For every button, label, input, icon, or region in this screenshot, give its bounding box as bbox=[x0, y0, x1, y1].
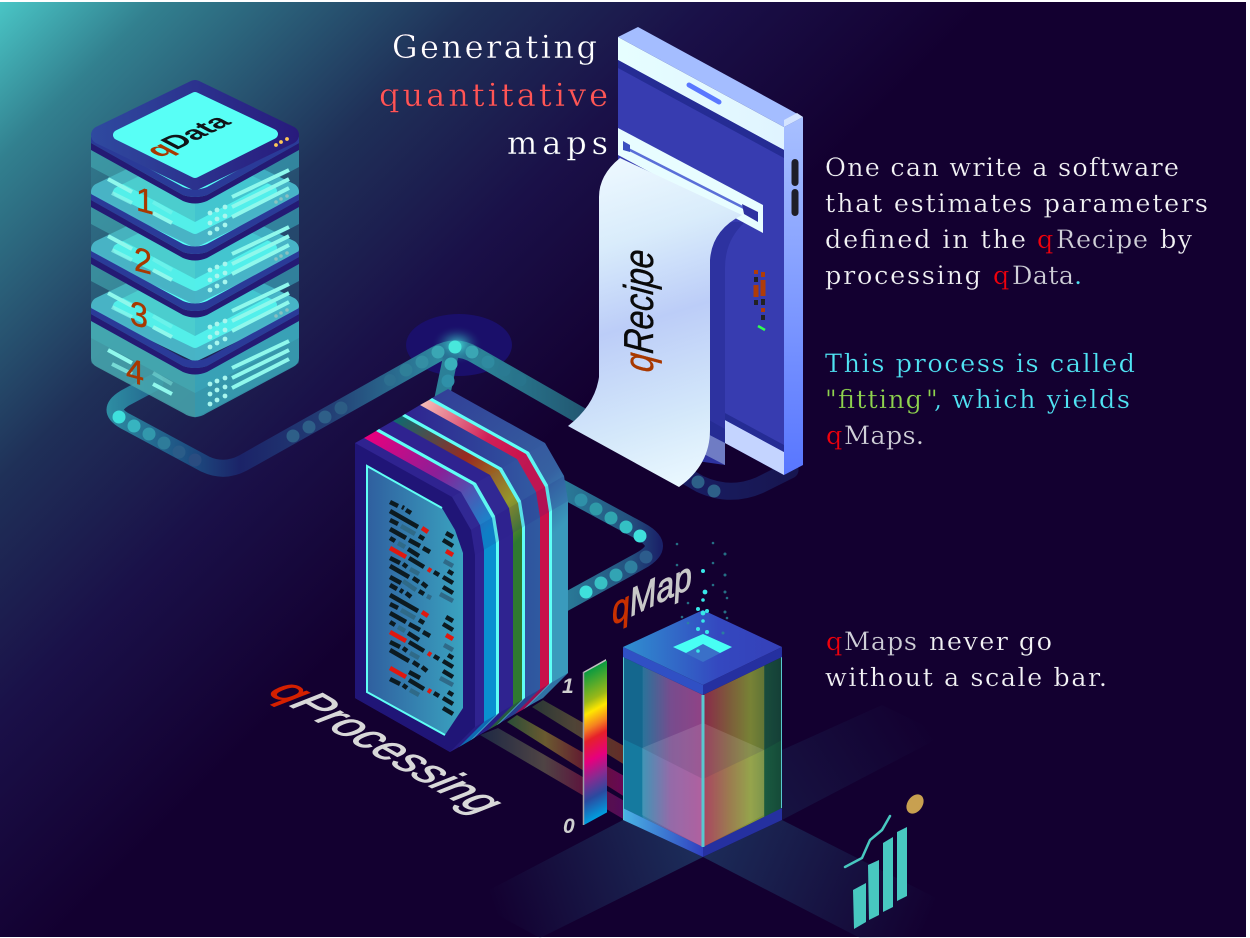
front face bbox=[355, 443, 475, 752]
rays from qProcessing to scale bar and cube bbox=[480, 700, 640, 820]
text: fitting explanation, part 1: q bbox=[1037, 225, 1053, 255]
text: scale bar note: never go bbox=[929, 627, 1052, 657]
magenta blue band bbox=[376, 429, 499, 740]
rear slab bbox=[432, 389, 568, 707]
label: 1: 1 bbox=[136, 180, 154, 223]
chamfer shading bbox=[452, 443, 564, 530]
text: fitting explanation, part 2: , bbox=[934, 385, 942, 415]
text: fitting explanation, part 2: which yields bbox=[952, 385, 1130, 415]
unit 2 walls bbox=[91, 199, 299, 304]
text: fitting explanation, part 1: q bbox=[993, 261, 1009, 291]
scale bar bbox=[562, 659, 607, 838]
text: fitting explanation, part 1: Data bbox=[1012, 261, 1074, 291]
text: scale bar note: without a scale bar. bbox=[825, 663, 1107, 693]
unit 4 lines bbox=[91, 313, 299, 418]
halo under pipe junction bbox=[406, 314, 512, 376]
paper strip: qRecipe bbox=[568, 158, 742, 487]
text: fitting explanation, part 2: q bbox=[826, 421, 842, 451]
pipe dots bbox=[112, 340, 720, 498]
label: 3: 3 bbox=[130, 294, 148, 337]
unit 3 walls bbox=[91, 256, 299, 361]
label: qMap: qMap bbox=[610, 553, 694, 633]
label: 4: 4 bbox=[126, 351, 144, 394]
scale label 1: 1 bbox=[562, 675, 574, 698]
phone side bbox=[784, 117, 803, 475]
icon: rising bar chart with coin bbox=[845, 791, 927, 929]
side buttons bbox=[792, 159, 798, 186]
floor glow cross bbox=[470, 705, 950, 938]
data screen bbox=[367, 466, 463, 735]
red band bbox=[429, 398, 552, 709]
base slab bbox=[623, 770, 782, 847]
text: fitting explanation, part 1: defined in the bbox=[825, 225, 1026, 255]
paper shadow bbox=[690, 222, 745, 465]
second slab bbox=[379, 421, 513, 738]
plate 1 bbox=[91, 146, 299, 260]
text: scale bar note: q bbox=[826, 627, 842, 657]
icon: pipe junction glow bbox=[431, 325, 483, 365]
label: qData: qData bbox=[138, 111, 240, 161]
text: scale bar note bbox=[825, 627, 1107, 693]
label: qProcessing: qProcessing bbox=[258, 672, 516, 821]
speaker bbox=[689, 85, 719, 102]
text: fitting explanation, part 1: by bbox=[1160, 225, 1193, 255]
translucent inner plane bbox=[642, 723, 764, 847]
text: scale bar note: Maps bbox=[844, 627, 917, 657]
olive green band bbox=[402, 414, 525, 725]
top slab bbox=[623, 647, 703, 695]
glass left bbox=[623, 657, 703, 847]
third slab bbox=[405, 405, 540, 723]
title: Generating bbox=[392, 28, 597, 66]
unit 1 walls bbox=[91, 142, 299, 247]
particles bbox=[676, 542, 728, 653]
text: fitting explanation, part 1: that estimates parameters bbox=[825, 189, 1208, 219]
unit 4 base bbox=[91, 313, 299, 417]
upper glass darkening bbox=[623, 657, 782, 779]
phone top face bbox=[618, 27, 803, 127]
text: fitting explanation, part 1: . bbox=[1074, 261, 1082, 291]
text: fitting explanation, part 2: fitting bbox=[838, 385, 922, 415]
label: qRecipe: qRecipe bbox=[617, 247, 663, 374]
printer slot bbox=[618, 128, 763, 233]
text: fitting explanation, part 1: One can write a software bbox=[825, 153, 1179, 183]
scale label 0: 0 bbox=[563, 815, 575, 838]
connection pipe from qData to qRecipe bbox=[115, 349, 790, 491]
text: fitting explanation, part 2: " bbox=[825, 385, 837, 415]
front slab bbox=[355, 438, 484, 752]
phone front bbox=[618, 37, 784, 475]
title: quantitative bbox=[379, 76, 608, 114]
title bbox=[379, 28, 608, 162]
text: fitting explanation, part 1 bbox=[825, 153, 1208, 291]
text: fitting explanation, part 2: " bbox=[926, 385, 938, 415]
code rows bbox=[390, 502, 453, 714]
label: 2: 2 bbox=[134, 240, 152, 283]
glass right bbox=[703, 657, 782, 847]
top plate bbox=[91, 89, 299, 204]
plate 2 bbox=[91, 203, 299, 318]
text: fitting explanation, part 1: Recipe bbox=[1056, 225, 1148, 255]
title: maps bbox=[507, 124, 608, 162]
text: fitting explanation, part 2: This process is called bbox=[825, 349, 1135, 379]
qProcessing block bbox=[355, 389, 568, 752]
pipe from qProcessing to qMap bbox=[555, 485, 654, 606]
glass edges bbox=[624, 655, 782, 847]
text: fitting explanation, part 1: processing bbox=[825, 261, 981, 291]
text: fitting explanation, part 2: Maps. bbox=[844, 421, 924, 451]
status glyphs bbox=[756, 270, 765, 330]
qMap cube bbox=[623, 610, 782, 857]
server stack: qData bbox=[91, 89, 299, 418]
cyan chevron bbox=[673, 634, 732, 653]
phone device bbox=[568, 27, 803, 487]
text: fitting explanation, part 2 bbox=[825, 349, 1135, 451]
plate 3 bbox=[91, 260, 299, 374]
